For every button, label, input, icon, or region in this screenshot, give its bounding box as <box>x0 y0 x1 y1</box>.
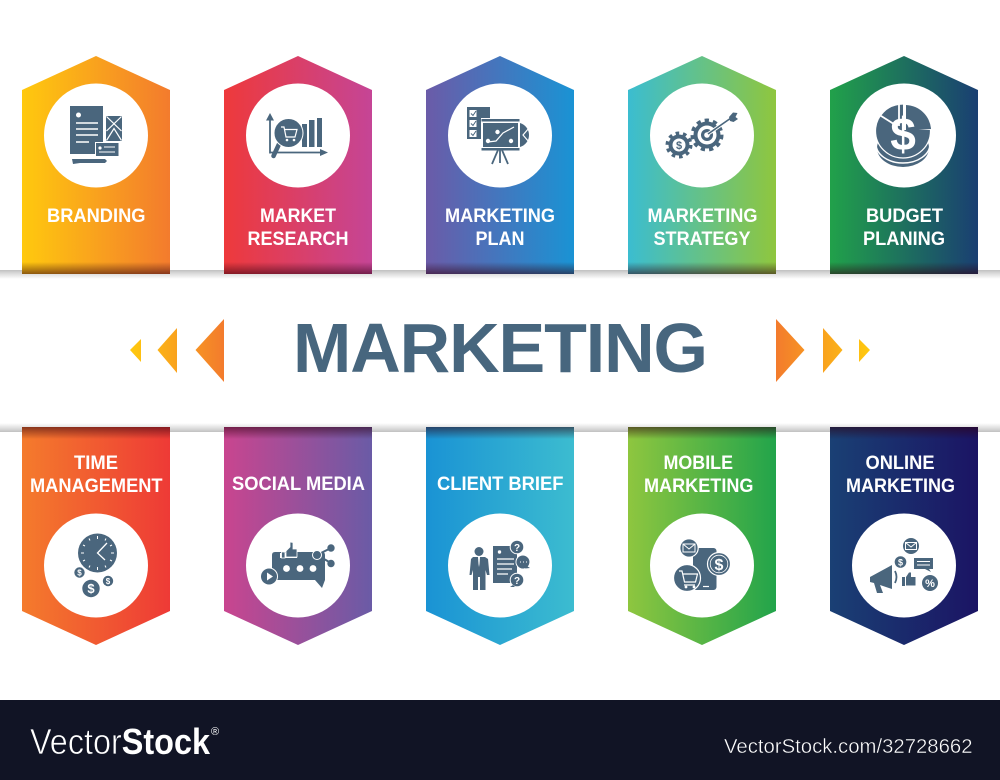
label line 2: RESEARCH <box>248 229 348 250</box>
icon: megaphone with thumb, mail, chat, dollar and percent: $ <box>898 558 903 568</box>
label: MARKET <box>260 206 336 227</box>
icon: document, envelope, card and pen <box>70 106 122 164</box>
label: SOCIAL MEDIA <box>232 474 365 495</box>
title: MARKETING <box>293 309 708 387</box>
footer registered mark: ® <box>211 726 219 738</box>
icon: dollar pie chart on coin stack <box>876 100 932 167</box>
icon: businessman with brief and question bubbles: ? <box>514 576 520 587</box>
panel: market research <box>224 56 372 274</box>
icon: chat bubble with thumb, share and play <box>260 542 335 588</box>
panel: marketing plan <box>426 56 574 274</box>
icon: businessman with brief and question bubbles <box>470 540 530 590</box>
banner shape <box>628 56 776 274</box>
lower band shadow line <box>0 423 1000 432</box>
left arrows <box>130 319 224 382</box>
label line 2: PLAN <box>476 229 524 250</box>
panel: time management <box>22 427 170 645</box>
label line 2: STRATEGY <box>654 229 751 250</box>
panel: marketing strategy <box>628 56 776 274</box>
icon: clock with coins <box>74 534 117 597</box>
panel: client brief <box>426 427 574 645</box>
banner shape <box>426 56 574 274</box>
label line 2: MARKETING <box>644 476 754 497</box>
icon: chart with magnifier and cart <box>266 113 328 156</box>
icon: clock with coins: $ <box>106 577 111 586</box>
icon: megaphone with thumb, mail, chat, dollar and percent: % <box>925 578 935 590</box>
icon: megaphone with thumb, mail, chat, dollar and percent <box>870 538 938 593</box>
upper band shadow line <box>0 270 1000 279</box>
banner shape <box>224 427 372 645</box>
icon: dollar pie chart on coin stack: $ <box>890 108 916 160</box>
banner shape <box>22 427 170 645</box>
label line 2: PLANING <box>863 229 945 250</box>
banner shape <box>22 56 170 274</box>
banner shape <box>628 427 776 645</box>
label: BUDGET <box>866 206 943 227</box>
label: TIME <box>74 453 118 474</box>
banner shape <box>224 56 372 274</box>
icon: phone with envelope, dollar and cart <box>674 539 730 592</box>
banner shape <box>426 427 574 645</box>
label: MOBILE <box>664 453 733 474</box>
icon: presentation board, checklist and clock <box>467 107 529 164</box>
label: CLIENT BRIEF <box>437 474 564 495</box>
footer image id: VectorStock.com/32728662 <box>724 736 972 758</box>
panel: branding <box>22 56 170 274</box>
label: MARKETING <box>648 206 758 227</box>
footer logo: VectorStock <box>30 721 211 762</box>
panel: mobile marketing <box>628 427 776 645</box>
label: ONLINE <box>866 453 934 474</box>
icon: clock with coins: $ <box>87 581 95 596</box>
icon: clock with coins: $ <box>77 568 82 578</box>
icon: gears and target with arrow: $ <box>676 140 682 152</box>
label line 2: MANAGEMENT <box>30 476 163 497</box>
label: MARKETING <box>445 206 555 227</box>
right arrows <box>776 319 870 382</box>
label: BRANDING <box>47 206 146 227</box>
banner shape <box>830 56 978 274</box>
panel: online marketing <box>830 427 978 645</box>
icon: gears and target with arrow <box>668 112 738 156</box>
icon: phone with envelope, dollar and cart: $ <box>715 557 724 574</box>
icon: businessman with brief and question bubbles: ? <box>514 543 520 554</box>
banner shape <box>830 427 978 645</box>
panel: budget planing <box>830 56 978 274</box>
label line 2: MARKETING <box>846 476 955 497</box>
footer bar <box>0 700 1000 780</box>
panel: social media <box>224 427 372 645</box>
